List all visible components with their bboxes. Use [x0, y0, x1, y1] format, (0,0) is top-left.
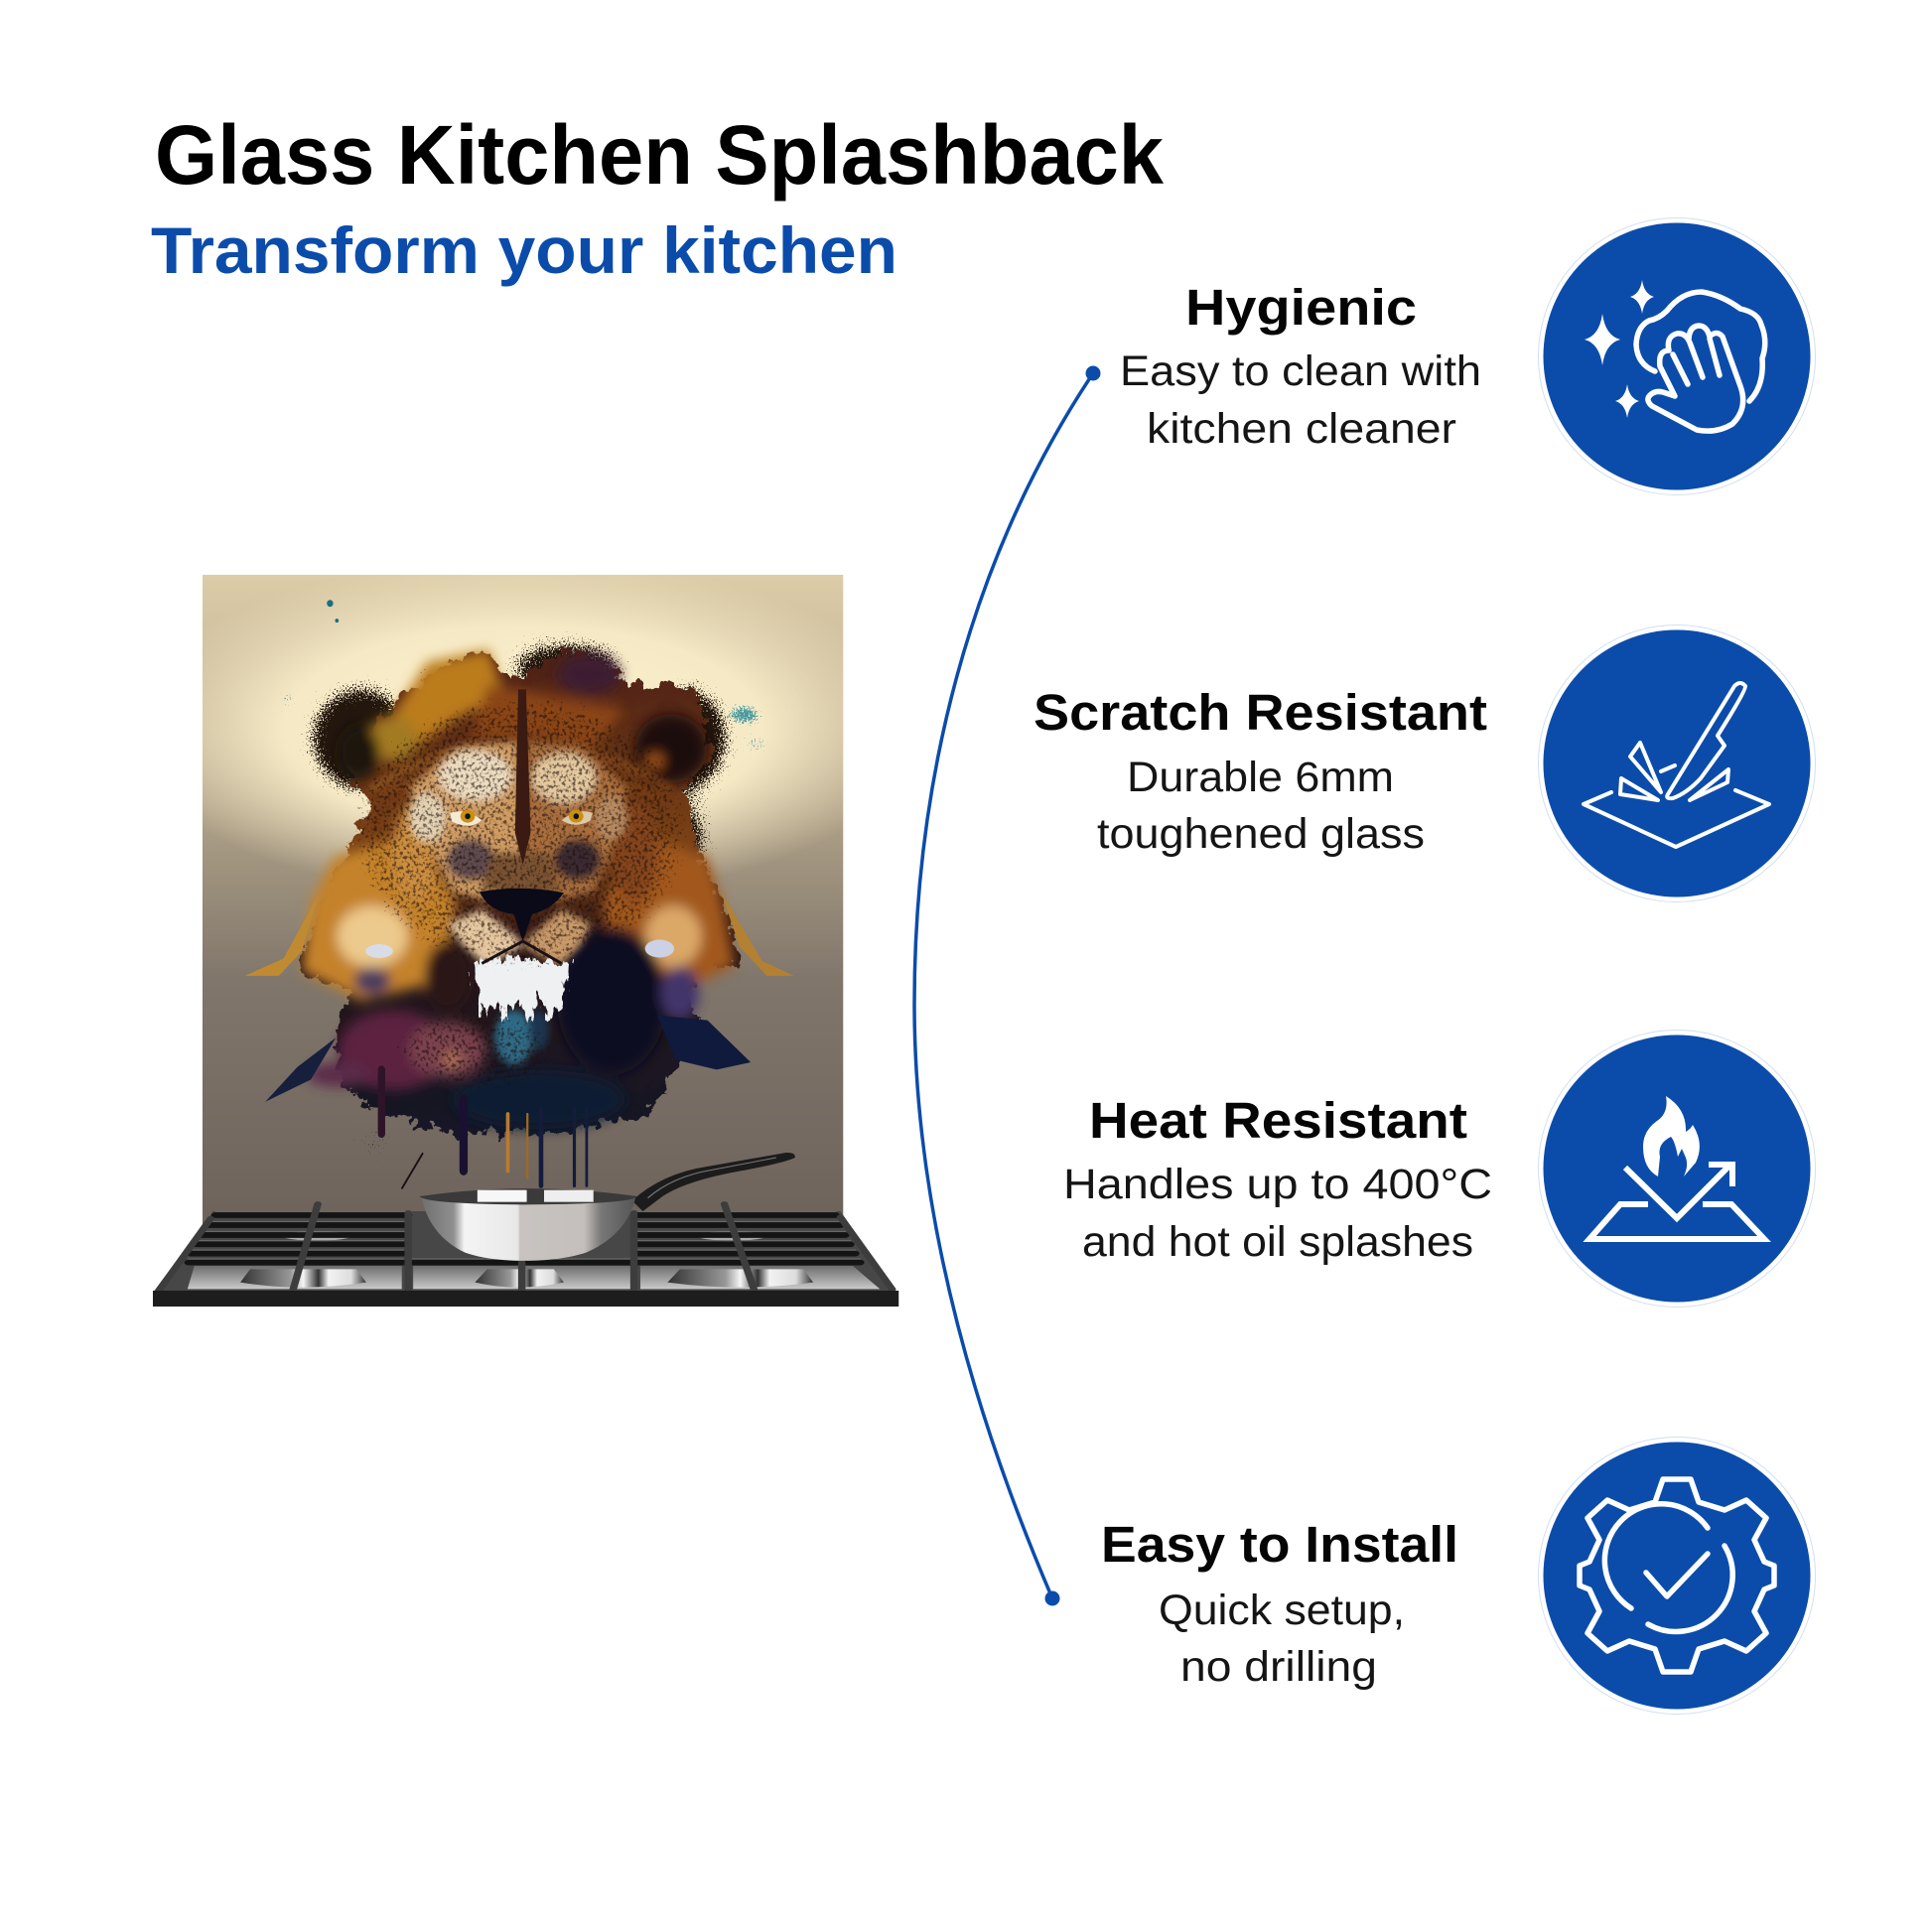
- feature: heat resistant text: [1063, 1092, 1492, 1266]
- handle highlight: [647, 1158, 776, 1198]
- pan rim: [420, 1188, 637, 1204]
- pan handle: [632, 1153, 795, 1211]
- splashback panel with lion artwork: [203, 575, 844, 1224]
- lion beard: [471, 956, 569, 1026]
- feature: easy to install text: [1101, 1516, 1458, 1691]
- title: Glass Kitchen Splashback: [155, 108, 1164, 202]
- feature: scratch resistant text: toughened glass: [1097, 810, 1425, 858]
- icon: hand wiping with sparkles: [1539, 218, 1815, 494]
- brush strokes: [245, 600, 794, 1102]
- front edge of hob: [153, 1291, 898, 1307]
- feature: heat resistant text: Handles up to 400°C: [1063, 1161, 1492, 1208]
- gas hob with frying pan: [153, 1153, 898, 1307]
- feature: scratch resistant text: [1034, 684, 1487, 858]
- icon: gear with check mark: [1539, 1438, 1815, 1714]
- feature: easy to install text: Quick setup,: [1159, 1587, 1405, 1634]
- feature: hygienic text: Easy to clean with: [1120, 347, 1481, 395]
- feature: hygienic text: kitchen cleaner: [1147, 405, 1456, 453]
- feature: hygienic text: Hygienic: [1185, 279, 1417, 336]
- lion eyes: [450, 810, 593, 826]
- feature: easy to install text: no drilling: [1180, 1643, 1377, 1691]
- pan bowl: [422, 1198, 635, 1261]
- connector curve with end dots: [914, 365, 1100, 1606]
- mane silhouette: [297, 650, 744, 1134]
- product image: splashback above gas hob: [122, 558, 924, 1307]
- steel trays: [188, 1266, 880, 1289]
- paint splatter specks: [275, 645, 771, 1151]
- forehead stripe: [515, 689, 530, 865]
- lion muzzle and forehead: [409, 742, 627, 1064]
- lion nose and mouth: [480, 889, 564, 941]
- feature: heat resistant text: Heat Resistant: [1089, 1092, 1467, 1149]
- feature: heat resistant text: and hot oil splashes: [1082, 1218, 1473, 1266]
- feature: scratch resistant text: Durable 6mm: [1127, 754, 1394, 801]
- panel background: [203, 575, 844, 1224]
- subtitle: Transform your kitchen: [151, 213, 897, 287]
- grate bars: [160, 1204, 893, 1290]
- mane colour masses: [302, 650, 735, 1129]
- burners: [240, 1231, 813, 1288]
- feature: hygienic text: [1120, 279, 1481, 453]
- lion face and mane: [245, 600, 794, 1188]
- fur texture: [355, 694, 687, 1095]
- feature: easy to install text: Easy to Install: [1101, 1516, 1458, 1573]
- icon: knife scratching glass: [1539, 625, 1815, 901]
- feature: scratch resistant text: Scratch Resistant: [1034, 684, 1487, 741]
- paint drips: [381, 1069, 587, 1188]
- hob surface: [154, 1211, 895, 1292]
- icon: flame on glass with arrow: [1539, 1031, 1815, 1307]
- fur streaks: [370, 752, 671, 798]
